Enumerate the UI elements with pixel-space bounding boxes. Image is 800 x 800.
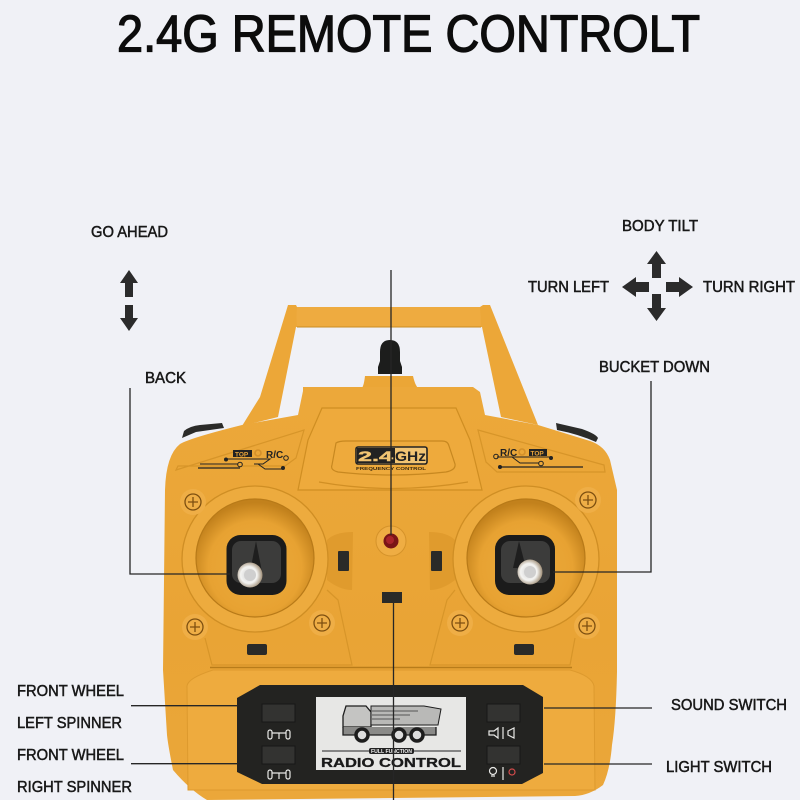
- label: sound switch: SOUND SWITCH: [671, 697, 787, 714]
- switch pockets: [327, 532, 455, 590]
- TOP R/C marks left: TOP: [235, 451, 249, 458]
- label: back: BACK: [145, 370, 187, 387]
- button icons: [268, 727, 515, 780]
- body shell: [163, 387, 617, 800]
- label: front wheel right spinner: [17, 747, 132, 796]
- label: bucket down: BUCKET DOWN: [599, 359, 710, 376]
- label: go ahead: GO AHEAD: [91, 224, 168, 241]
- left joystick: [182, 486, 328, 632]
- leader lines: [130, 270, 652, 800]
- LCD screen: FULL FUNCTION: [371, 749, 412, 755]
- label: turn right: TURN RIGHT: [703, 279, 796, 296]
- antenna: [362, 340, 418, 388]
- label: turn left: TURN LEFT: [528, 279, 610, 296]
- 2.4GHz badge: FREQUENCY CONTROL: [356, 466, 427, 471]
- remote control: [163, 305, 617, 800]
- label: front wheel right spinner: RIGHT SPINNER: [17, 779, 132, 796]
- TOP R/C marks left: [198, 450, 288, 470]
- trim switches: [247, 551, 534, 655]
- R/C TOP marks right: R/C: [500, 448, 517, 459]
- 2.4GHz badge: GHz: [395, 448, 426, 464]
- screws: [180, 487, 601, 640]
- icon: up and down arrows: [120, 270, 138, 331]
- label: light switch: LIGHT SWITCH: [666, 759, 772, 776]
- label: body tilt: BODY TILT: [622, 218, 699, 235]
- R/C TOP marks right: [494, 448, 583, 469]
- truck: [343, 706, 441, 741]
- centre face plate: [205, 408, 575, 668]
- TOP R/C marks left: R/C: [266, 450, 283, 461]
- lower panel: [187, 670, 595, 790]
- LCD screen: RADIO CONTROL: [321, 755, 461, 770]
- side bumpers: [182, 423, 224, 438]
- title: 2.4G REMOTE CONTROLT: [117, 6, 700, 64]
- right joystick: [453, 486, 599, 632]
- 2.4GHz badge: [356, 447, 427, 471]
- label: front wheel left spinner: FRONT WHEEL: [17, 683, 124, 700]
- label: front wheel left spinner: [17, 683, 124, 732]
- control panel: [237, 685, 543, 784]
- switch buttons: [262, 704, 520, 764]
- label: front wheel left spinner: LEFT SPINNER: [17, 715, 122, 732]
- icon: four direction arrows: [622, 251, 693, 321]
- LCD screen: [316, 697, 466, 770]
- R/C TOP marks right: TOP: [530, 450, 544, 457]
- wing badge panels: [176, 430, 605, 472]
- LED indicator: [376, 526, 406, 556]
- label: front wheel right spinner: FRONT WHEEL: [17, 747, 124, 764]
- 2.4GHz badge: 2.4: [358, 448, 393, 464]
- handle: [242, 305, 538, 426]
